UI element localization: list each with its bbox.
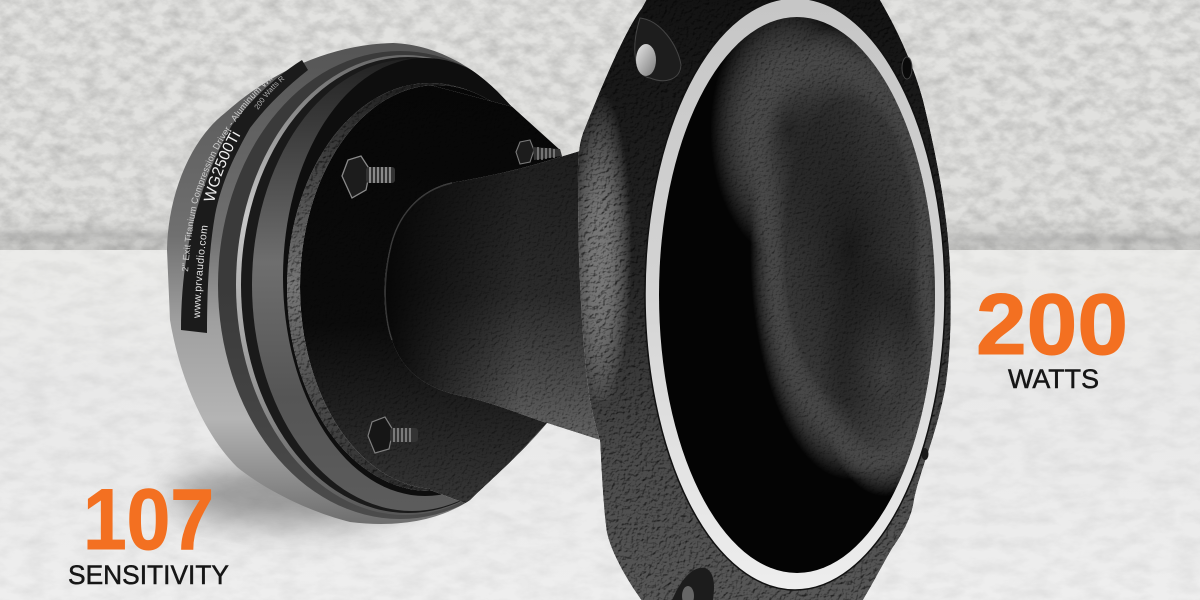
number: 200: 200	[976, 277, 1128, 373]
faceplate ear: upper left	[635, 18, 681, 81]
number: 107: 107	[83, 472, 214, 568]
small screw: upper right	[902, 57, 912, 79]
driver rear can	[167, 43, 600, 524]
mounting bolt: lower	[368, 417, 418, 453]
mounting bolt: upper left	[342, 156, 395, 198]
inner cone	[659, 17, 935, 573]
product label strip	[181, 60, 308, 333]
stat: 107 sensitivity	[68, 472, 229, 590]
horn mouth	[645, 0, 950, 590]
faceplate ear: lower	[670, 568, 714, 600]
small screw: lower right	[922, 448, 928, 460]
compression driver body	[167, 43, 562, 524]
horn faceplate	[578, 0, 951, 600]
silver trim ring	[645, 0, 945, 590]
floor shadow under the driver	[170, 465, 410, 525]
label text: website: www.prvaudio.com	[194, 226, 208, 318]
driver front flange rings	[218, 51, 600, 519]
mounting bolt: upper right	[516, 140, 562, 164]
label text: model number: WG2500Ti	[204, 130, 240, 200]
unit: sensitivity: SENSITIVITY	[68, 560, 229, 590]
stat: 200 watts	[976, 277, 1128, 394]
unit: watts: WATTS	[1008, 364, 1099, 394]
horn neck	[384, 150, 600, 440]
